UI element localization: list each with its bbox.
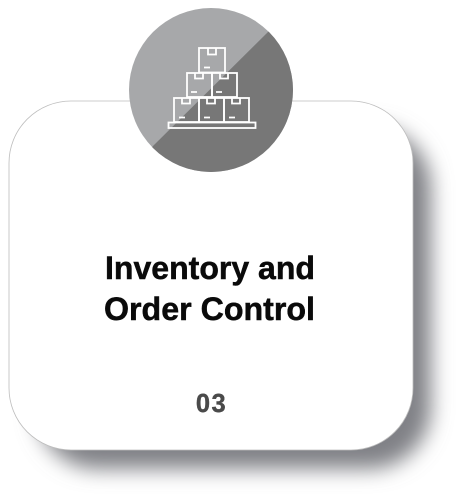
card panel xyxy=(9,101,413,450)
title: Order Control xyxy=(104,291,315,327)
icon: stacked boxes on pallet xyxy=(168,48,256,128)
title xyxy=(104,250,315,327)
drop shadow xyxy=(36,126,431,469)
number: 03 xyxy=(196,390,227,418)
icon badge circle xyxy=(129,8,293,172)
title: Inventory and xyxy=(105,250,315,286)
